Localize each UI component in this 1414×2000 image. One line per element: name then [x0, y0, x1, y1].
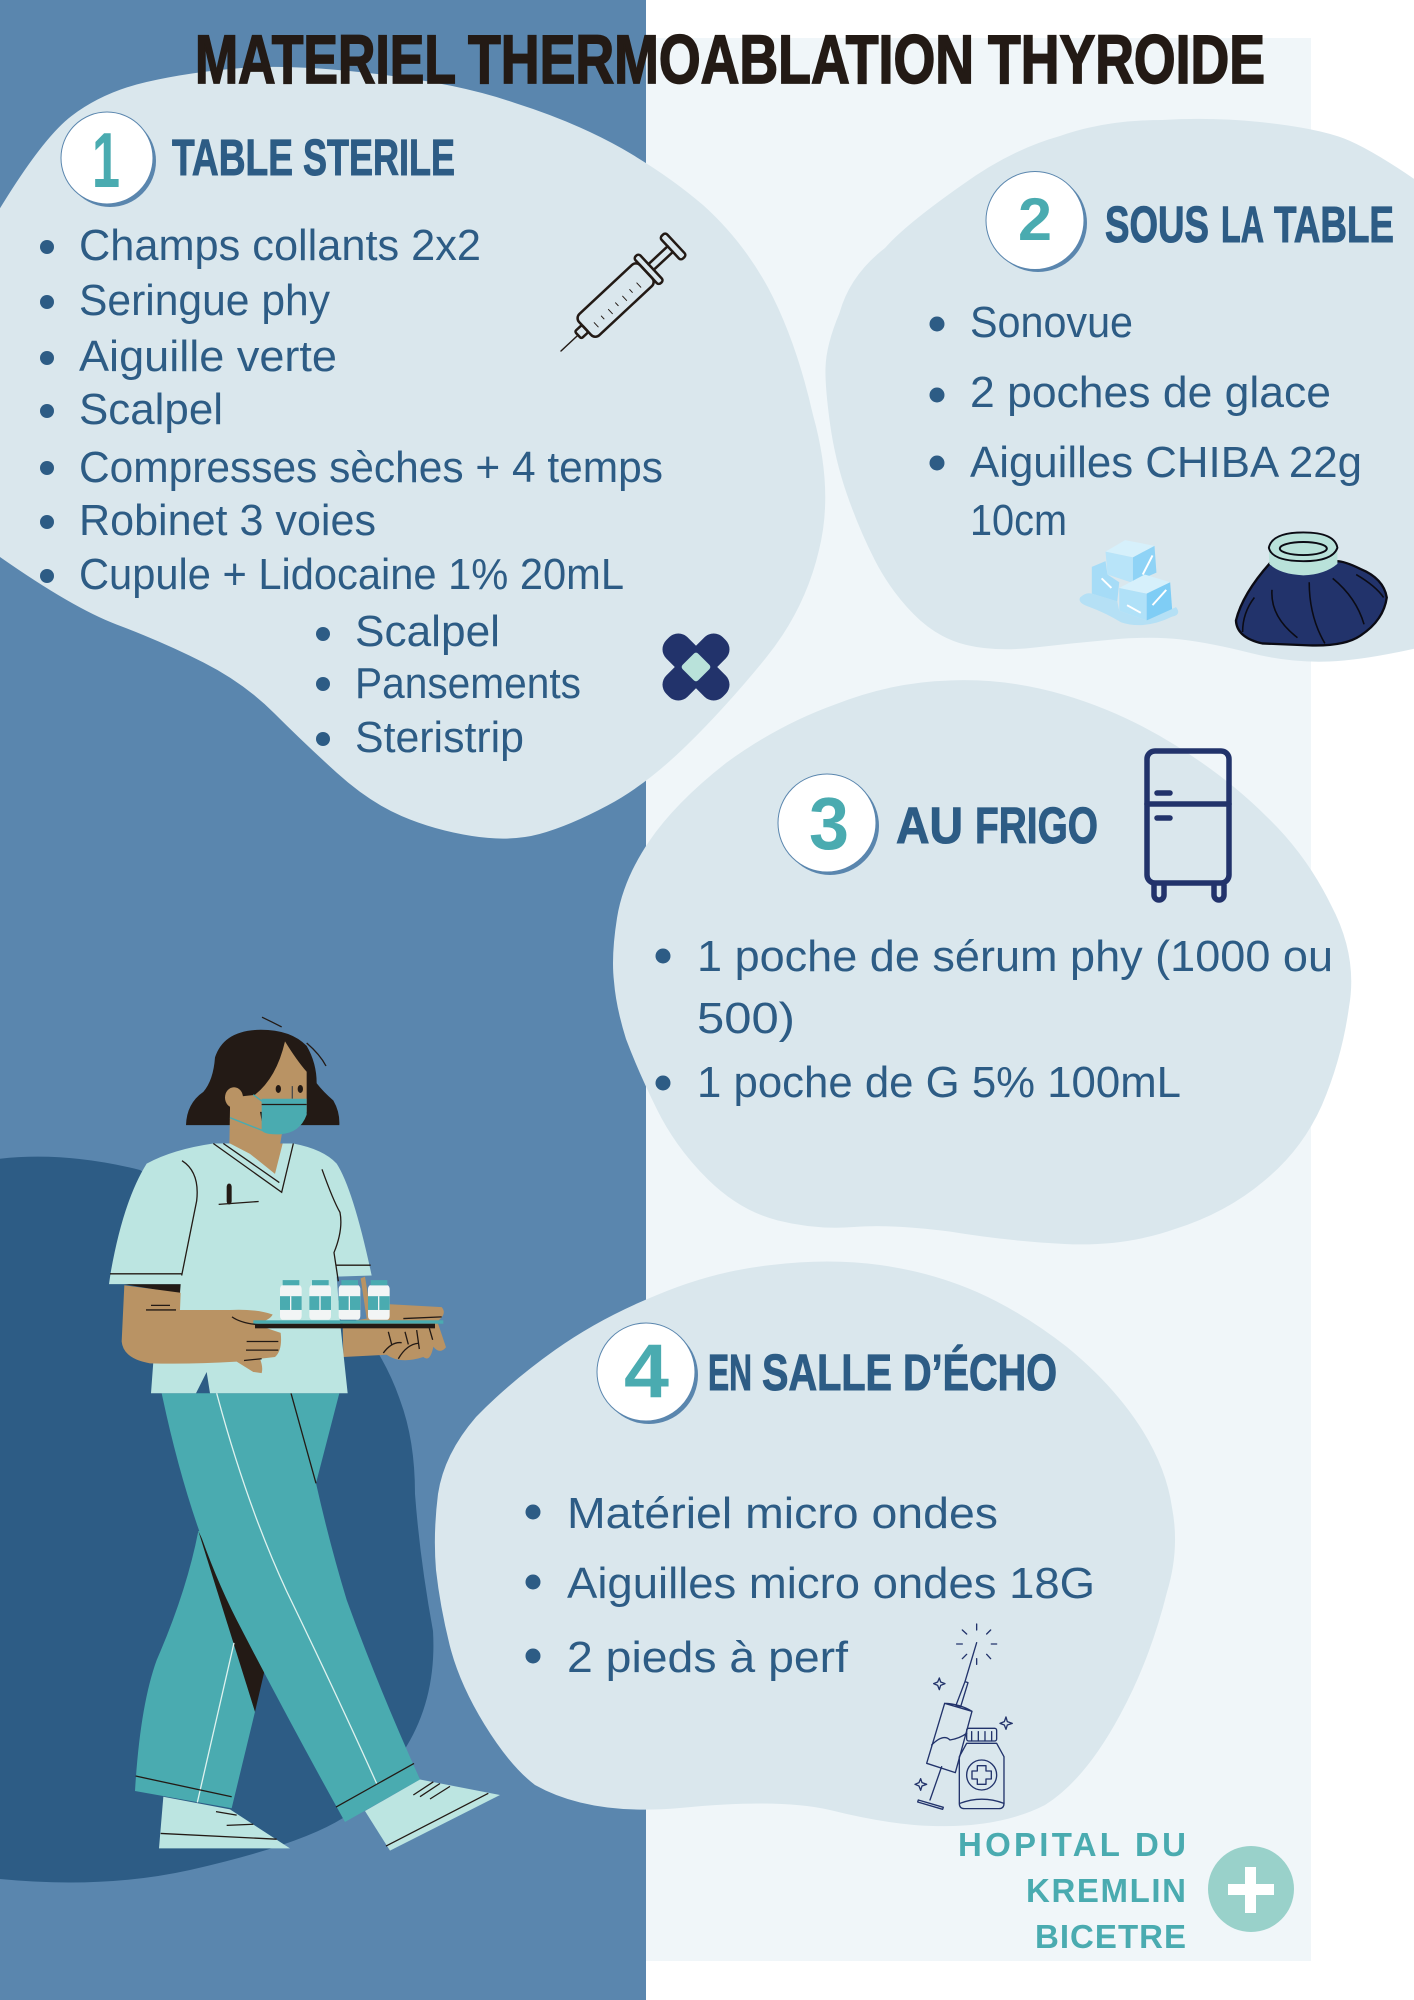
list: table sterile items: Champs collants 2x2: [79, 221, 481, 270]
heading: table sterile: TABLE: [172, 129, 293, 186]
heading: sous la table: [1105, 196, 1394, 253]
number badge 4: 4: [624, 1329, 669, 1414]
list: table sterile items: Compresses sèches + 4 temps: [79, 443, 663, 492]
blue left background band: [0, 0, 646, 2000]
icon: syringe and vial line art: [915, 1624, 1012, 1809]
back shoe: [159, 1797, 290, 1848]
hospital name: BICETRE: [1035, 1918, 1186, 1955]
list: table sterile items: Steristrip: [355, 713, 524, 762]
number badge 1: [61, 112, 156, 207]
hospital name: HOPITAL DU: [958, 1826, 1186, 1863]
heading: au frigo: AU: [896, 797, 963, 854]
list: table sterile items: Aiguille verte: [79, 332, 337, 381]
list: au frigo items: 1 poche de G 5% 100mL: [697, 1058, 1181, 1107]
tray: [253, 1320, 443, 1328]
front shoe: [365, 1779, 500, 1851]
sleeve shadow: [124, 1284, 182, 1294]
list: table sterile items: Robinet 3 voies: [79, 496, 376, 545]
title: THYROIDE: [988, 21, 1265, 98]
heading: sous la table: LA: [1221, 196, 1264, 253]
list: sous la table items: Aiguilles CHIBA 22g: [970, 438, 1362, 487]
number badge 3: 3: [809, 782, 849, 865]
neck and face: [225, 1041, 307, 1175]
dark blob behind nurse: [0, 1157, 433, 1882]
list: sous la table items: 10cm: [970, 496, 1067, 545]
arm and finger lines: [146, 1305, 442, 1360]
list: au frigo items: 1 poche de sérum phy (1000 ou: [697, 932, 1333, 981]
hospital name: [958, 1826, 1186, 1955]
icon: medical cross badge: [1208, 1846, 1294, 1932]
list: sous la table items: [930, 298, 1362, 545]
neckline and top details: [110, 1144, 371, 1281]
heading: en salle d'echo: [708, 1344, 1057, 1401]
list: en salle d'echo items: Matériel micro ondes: [567, 1489, 998, 1538]
near arm and hand: [122, 1285, 281, 1373]
number badge 2: [986, 172, 1087, 272]
list: au frigo items: [656, 932, 1333, 1107]
pale right background panel: [646, 38, 1311, 1961]
heading: au frigo: FRIGO: [975, 797, 1098, 854]
heading: en salle d'echo: SALLE: [762, 1344, 892, 1401]
list: table sterile items: Seringue phy: [79, 276, 330, 325]
list: en salle d'echo items: [526, 1489, 1095, 1682]
list: sous la table items: Sonovue: [970, 298, 1133, 347]
list: sous la table items: 2 poches de glace: [970, 368, 1331, 417]
heading: table sterile: [172, 129, 455, 186]
heading: sous la table: SOUS: [1105, 196, 1209, 253]
heading: en salle d'echo: D’ÉCHO: [903, 1344, 1057, 1401]
surgical mask: [230, 1017, 326, 1134]
hair: [186, 1030, 339, 1125]
vials: [280, 1280, 390, 1320]
icon: syringe: [548, 230, 688, 364]
list: table sterile items: Scalpel: [355, 607, 500, 656]
list: table sterile items: Cupule + Lidocaine 1% 20mL: [79, 550, 624, 599]
scrub top: [109, 1144, 372, 1393]
leg details: [136, 1393, 488, 1846]
eyes and nose: [276, 1085, 303, 1099]
panel 2: sous la table: [825, 119, 1414, 662]
list: table sterile items: Scalpel: [79, 385, 223, 434]
title: MATERIEL: [195, 21, 456, 98]
back leg: [135, 1531, 255, 1808]
hospital name: KREMLIN: [1026, 1872, 1186, 1909]
number badge 4: [597, 1323, 698, 1424]
icon: bandage: [657, 628, 735, 706]
icon: ice bag: [1236, 532, 1387, 645]
title: THERMOABLATION: [468, 21, 974, 98]
list: en salle d'echo items: 2 pieds à perf: [567, 1633, 849, 1682]
front leg: [162, 1393, 420, 1822]
title: [195, 21, 1265, 98]
panel 1: table sterile: [0, 67, 825, 839]
panel 4: en salle d'echo: [435, 1262, 1175, 1826]
list: table sterile items: [40, 221, 663, 762]
illustration: nurse carrying vials on a tray: [109, 1017, 500, 1851]
number badge 3: [778, 774, 879, 875]
blob 3: [613, 680, 1351, 1244]
list: en salle d'echo items: Aiguilles micro ondes 18G: [567, 1559, 1095, 1608]
leg shadow: [198, 1531, 265, 1712]
heading: au frigo: [896, 797, 1098, 854]
icon: fridge: [1147, 751, 1229, 900]
heading: table sterile: STERILE: [303, 129, 455, 186]
list: table sterile items: Pansements: [355, 659, 581, 708]
blob 4: [435, 1262, 1175, 1826]
heading: en salle d'echo: EN: [708, 1344, 752, 1401]
blob 2: [825, 119, 1414, 662]
panel 3: au frigo: [613, 680, 1351, 1244]
list: au frigo items: 500): [697, 994, 795, 1043]
number badge 2: 2: [1018, 186, 1052, 253]
far arm and hand: [343, 1277, 446, 1360]
number badge 1: 1: [92, 116, 120, 204]
blob 1: [0, 67, 825, 839]
icon: ice cubes: [1080, 540, 1178, 625]
